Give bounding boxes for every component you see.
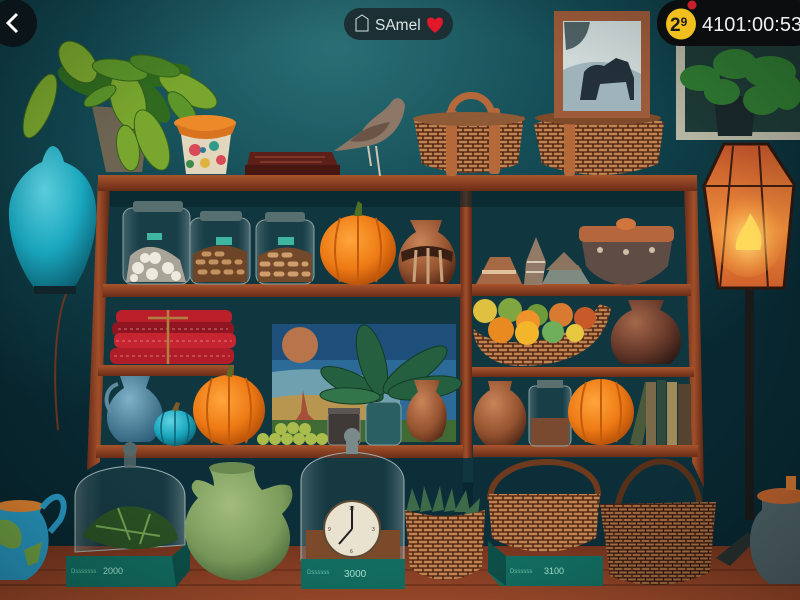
- score counter pill: 2: [670, 15, 681, 36]
- orange pumpkin shelf 2: [193, 365, 265, 445]
- potted plant top left: [16, 34, 222, 175]
- price label box 1: 2000: [103, 566, 123, 576]
- centre upright: [460, 182, 472, 458]
- framed horse picture: [554, 11, 650, 118]
- right upright: [684, 178, 704, 488]
- grape cluster: [257, 422, 328, 445]
- striped clay vase shelf 1: [398, 220, 456, 284]
- brown round pot shelf 2 right: [611, 300, 681, 364]
- title pill: SAmel: [375, 17, 421, 34]
- price label box 3: 3100: [544, 566, 564, 576]
- jar: brown nuts: [190, 211, 250, 284]
- glass jar with clock: 9: [328, 527, 331, 533]
- orange pumpkin right shelf 3: [568, 379, 634, 445]
- lantern floor lamp: [704, 144, 794, 520]
- shelf boards row 3: [96, 445, 463, 458]
- shelf back panel: [90, 180, 703, 490]
- jar: white stones: [123, 201, 190, 284]
- glass jar with clock: [301, 428, 404, 560]
- jar: tan beans: [256, 212, 314, 284]
- score counter pill: 9: [681, 15, 688, 29]
- teal vase left: [9, 146, 96, 430]
- glass jar shelf 3 right: [529, 380, 571, 446]
- lidded pot shelf 1 right: [579, 218, 674, 285]
- price label box 3: Dssssss: [510, 569, 532, 575]
- wicker basket bottom centre: [488, 462, 600, 552]
- landscape painting with moon: [272, 324, 456, 442]
- glass jar with clock: 12: [349, 506, 355, 512]
- globe teapot bottom left: [0, 497, 64, 580]
- basket top right: [534, 104, 664, 176]
- coin badge: [666, 8, 696, 40]
- icon: heart: [427, 17, 443, 33]
- wicker basket bottom right: [600, 461, 716, 585]
- score counter pill: [657, 0, 800, 46]
- top board: [98, 175, 697, 191]
- small teal pumpkin: [154, 402, 196, 446]
- terracotta round vase shelf 3: [474, 381, 526, 445]
- wooden table: [0, 546, 800, 600]
- price label box 2: Dssssss: [307, 570, 329, 576]
- leaning books: [630, 380, 691, 446]
- glass cloche with leaves: [75, 442, 185, 552]
- left upright: [87, 178, 110, 470]
- timer: 4101:00:53: [702, 14, 800, 36]
- framed plant picture top right: [676, 30, 800, 140]
- glass jars row 1: [123, 201, 314, 284]
- small jar on shelf 3: [328, 408, 360, 445]
- fruit basket: [473, 298, 611, 366]
- carved box: [245, 152, 340, 175]
- basket top middle: [413, 96, 525, 176]
- price label box 3: [488, 541, 603, 586]
- icon: tag: [356, 15, 368, 31]
- price label box 2: [301, 559, 405, 589]
- shelf boards row 1: [103, 284, 461, 297]
- bookshelf: [87, 175, 704, 545]
- woven basket with succulent: [405, 486, 485, 580]
- large orange pumpkin shelf 1: [320, 201, 396, 285]
- green ceramic jug: [185, 462, 292, 580]
- shelf boards row 2: [98, 365, 234, 376]
- small pottery shelf 1 right: [476, 237, 590, 285]
- bird figurine: [334, 98, 405, 176]
- price label box 1: Dsssssss: [71, 569, 96, 575]
- notification dot: [688, 0, 696, 10]
- floral pot: [174, 115, 236, 174]
- terracotta bottle vase: [406, 380, 447, 442]
- glass jar with clock: 6: [350, 549, 353, 555]
- blue ceramic jug: [107, 376, 163, 442]
- price label box 2: 3000: [344, 569, 367, 580]
- price label box 1: [66, 541, 190, 587]
- stacked red folded fabric: [110, 310, 236, 364]
- grey kettle bottom right: [716, 476, 800, 584]
- glass jar with clock: 3: [372, 527, 375, 533]
- back button: [0, 0, 37, 47]
- title pill: [344, 8, 453, 40]
- leafy plant in glass vase: [317, 322, 463, 445]
